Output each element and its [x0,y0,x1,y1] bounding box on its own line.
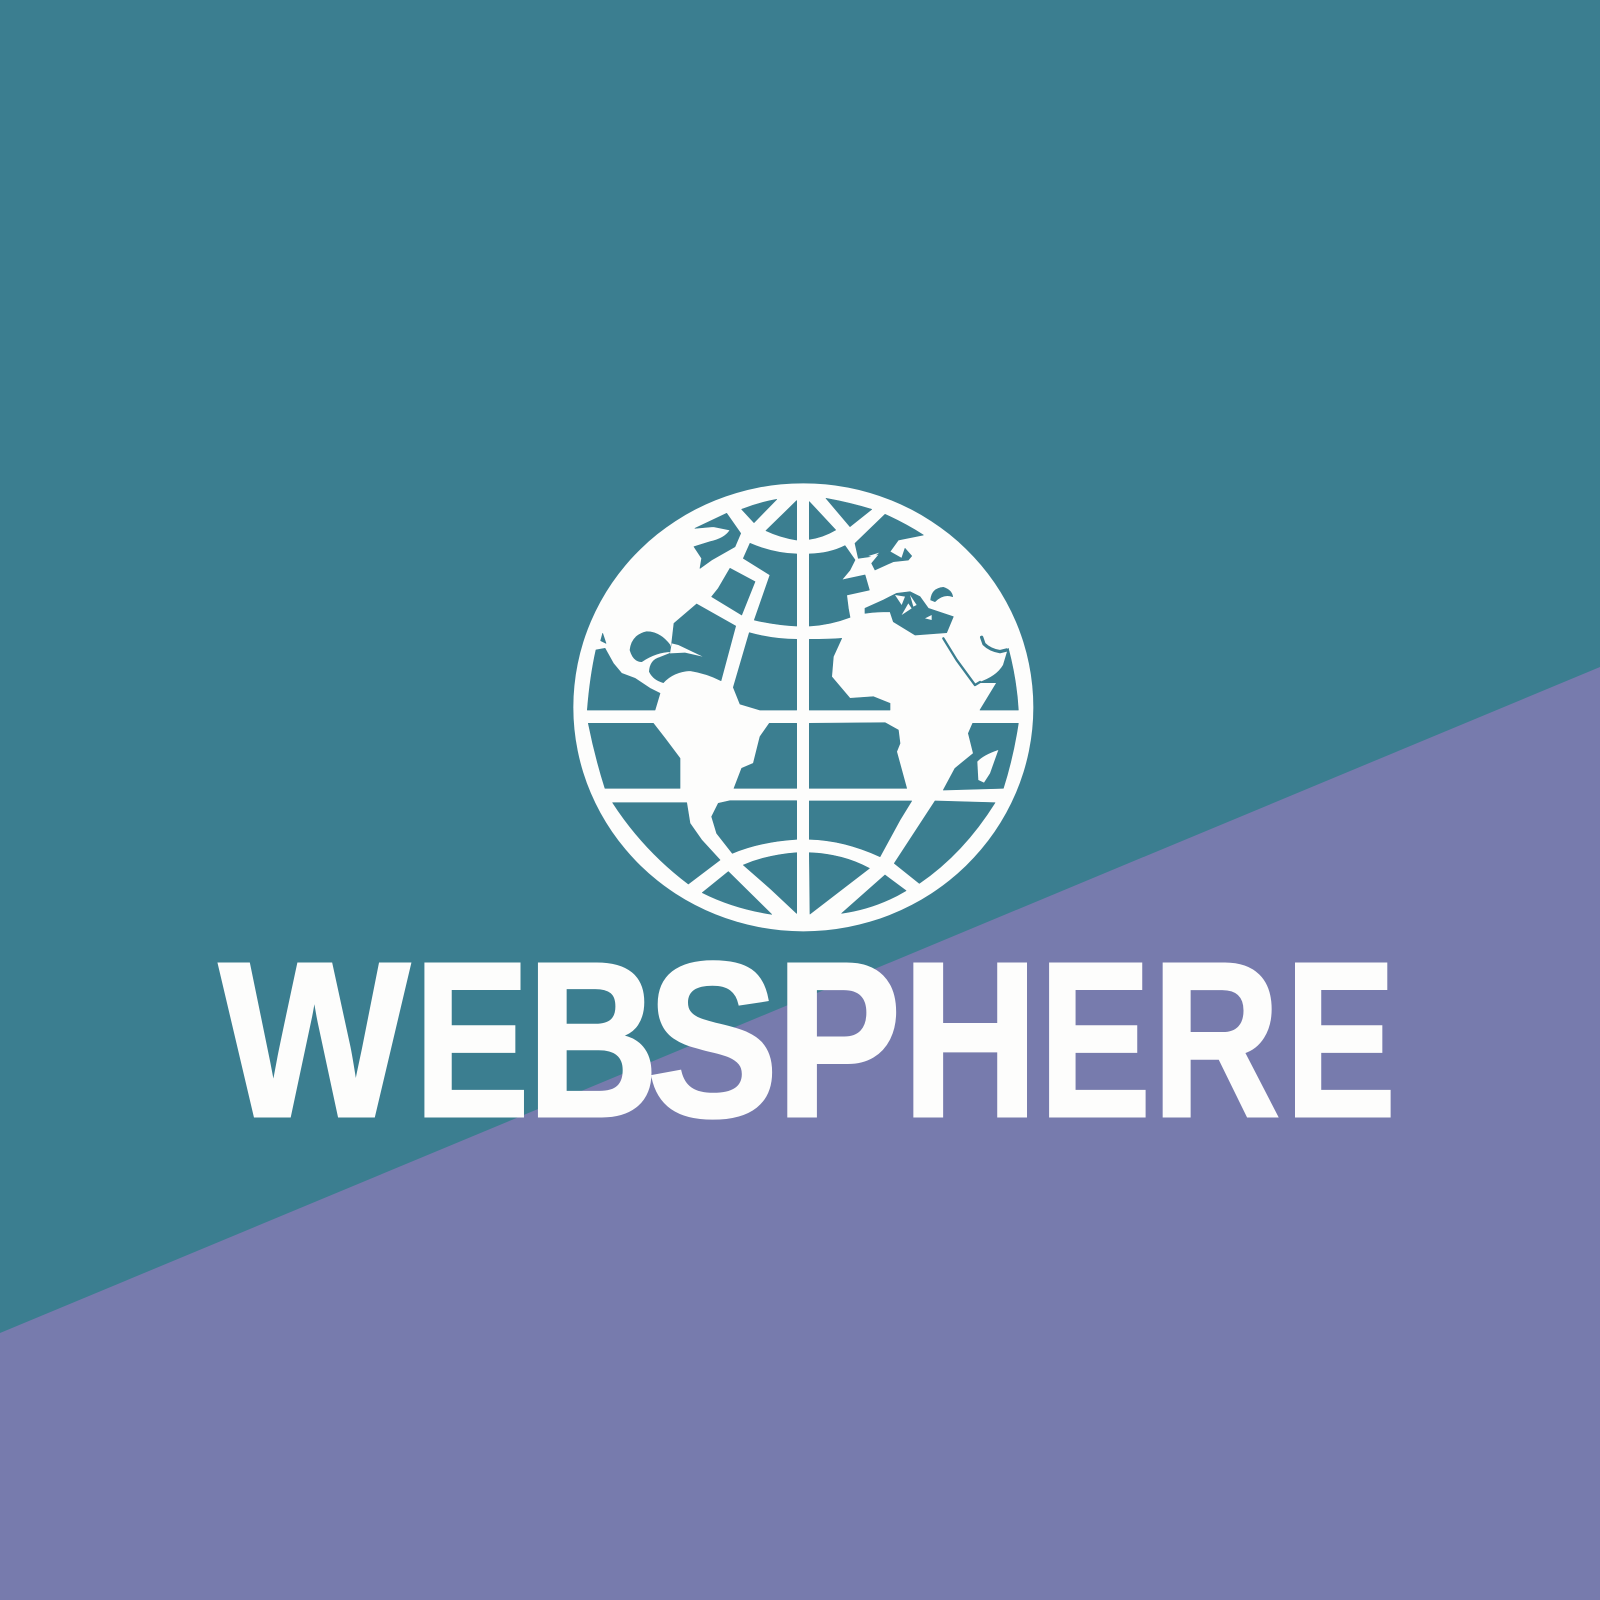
wordmark: WEBSPHERE: E [1039,916,1151,1162]
wordmark: WEBSPHERE: S [647,916,779,1162]
wordmark: WEBSPHERE: B [527,916,658,1162]
wordmark: WEBSPHERE: E [1284,916,1395,1162]
background: purple diagonal field [0,667,1600,1600]
wordmark: WEBSPHERE [218,916,1395,1162]
wordmark: WEBSPHERE: E [414,916,530,1162]
wordmark: WEBSPHERE: R [1152,916,1280,1162]
wordmark: WEBSPHERE: H [902,916,1039,1162]
wordmark: WEBSPHERE: W [219,916,410,1162]
wordmark: WEBSPHERE: P [776,916,902,1162]
icon: wireframe globe with continents [573,483,1033,931]
